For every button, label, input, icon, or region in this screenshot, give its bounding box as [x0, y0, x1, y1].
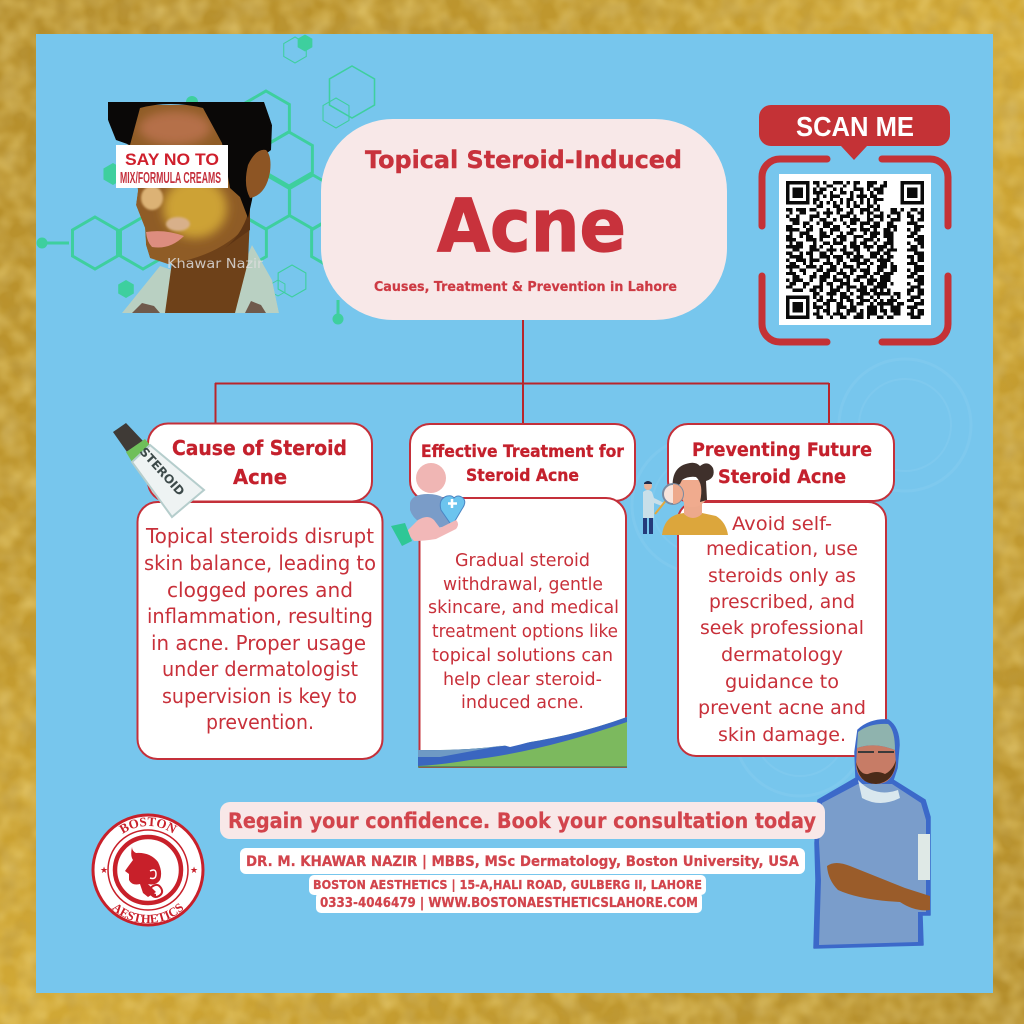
panel: cause: Acne: [233, 465, 287, 489]
scan me bubble: SCAN ME: [796, 111, 914, 142]
panel: prevention: prevent acne and: [698, 697, 866, 719]
closing call to action: [220, 802, 825, 839]
panel: treatment: induced acne.: [461, 693, 584, 713]
panel: treatment: Gradual steroid: [455, 551, 590, 571]
doctor credentials: [240, 848, 805, 874]
panel: prevention: dermatology: [721, 644, 843, 666]
boston aesthetics logo: BOSTON: [118, 817, 178, 834]
QR code: [779, 174, 931, 325]
icon: steroid tube: STEROID: [137, 445, 187, 499]
say no to banner: [116, 145, 228, 188]
QR scanner brackets: [762, 159, 948, 342]
panel: cause: in acne. Proper usage: [151, 631, 366, 655]
panel: prevention: Avoid self-: [732, 513, 832, 535]
clinic contact: [316, 892, 702, 913]
woman silhouette: [125, 847, 162, 897]
panel: prevention: guidance to: [725, 671, 839, 693]
panel: prevention: prescribed, and: [709, 591, 855, 613]
panel: prevention: steroids only as: [708, 565, 856, 587]
panel: treatment: help clear steroid-: [443, 670, 602, 690]
hair and ear: [108, 100, 272, 218]
clinic address: [309, 875, 706, 895]
panel: cause: under dermatologist: [162, 657, 358, 681]
icon: steroid tube: [113, 423, 204, 517]
title pill: Causes, Treatment & Prevention in Lahore: [374, 280, 677, 295]
panel: treatment: Effective Treatment for: [421, 442, 625, 461]
panel: treatment: withdrawal, gentle: [443, 575, 603, 595]
panel: prevention: seek professional: [700, 617, 864, 639]
panel: prevention: skin damage.: [718, 724, 846, 746]
face: [125, 105, 250, 264]
doctor portrait: [814, 720, 930, 948]
boston aesthetics logo: [92, 814, 204, 926]
panel: cause: Topical steroids disrupt: [145, 524, 374, 548]
panel: treatment: treatment options like: [432, 622, 618, 642]
panel: treatment: skincare, and medical: [428, 598, 619, 618]
neck and shirt: [122, 230, 279, 313]
icon: doctor examining woman: [643, 463, 728, 535]
scan me bubble: [759, 105, 950, 160]
panel: cause: [138, 424, 382, 759]
panel: cause: prevention.: [206, 710, 314, 734]
panel: prevention: Steroid Acne: [718, 467, 846, 488]
closing call to action: Regain your confidence. Book your consultation today: [228, 809, 816, 834]
panel: prevention: Preventing Future: [692, 440, 872, 461]
photo watermark: Khawar Nazir: [167, 257, 264, 272]
doctor credentials: DR. M. KHAWAR NAZIR | MBBS, MSc Dermatology, Boston University, USA: [246, 854, 799, 870]
panel: treatment: topical solutions can: [432, 646, 613, 666]
panel: cause: supervision is key to: [162, 684, 357, 708]
say no to banner: SAY NO TO: [125, 150, 219, 169]
boston aesthetics logo: ★: [190, 866, 198, 876]
patient photo with acne: [108, 100, 279, 313]
boston aesthetics logo: AESTHETICS: [112, 903, 183, 924]
panel: cause: clogged pores and: [167, 578, 353, 602]
panel: treatment: [410, 424, 635, 768]
title pill: [321, 119, 727, 320]
hexagon molecule decoration: [36, 34, 375, 324]
clinic address: BOSTON AESTHETICS | 15-A,HALI ROAD, GULBERG II, LAHORE: [313, 878, 702, 892]
icon: hand holding person: [391, 463, 465, 546]
faint logo watermarks: [632, 359, 971, 796]
panel: cause: inflammation, resulting: [147, 604, 373, 628]
connector lines: [215, 320, 829, 423]
title pill: Acne: [437, 184, 626, 269]
panel: prevention: [668, 424, 894, 756]
title pill: Topical Steroid-Induced: [365, 146, 682, 174]
say no to banner: MIX/FORMULA CREAMS: [120, 170, 221, 187]
panel: cause: Cause of Steroid: [172, 436, 347, 460]
boston aesthetics logo: ★: [100, 866, 108, 876]
clinic contact: 0333-4046479 | WWW.BOSTONAESTHETICSLAHORE.COM: [320, 896, 698, 911]
panel: cause: skin balance, leading to: [144, 551, 376, 575]
panel: treatment: Steroid Acne: [466, 466, 579, 485]
swoosh footer: [418, 717, 627, 768]
panel: prevention: medication, use: [706, 538, 858, 560]
